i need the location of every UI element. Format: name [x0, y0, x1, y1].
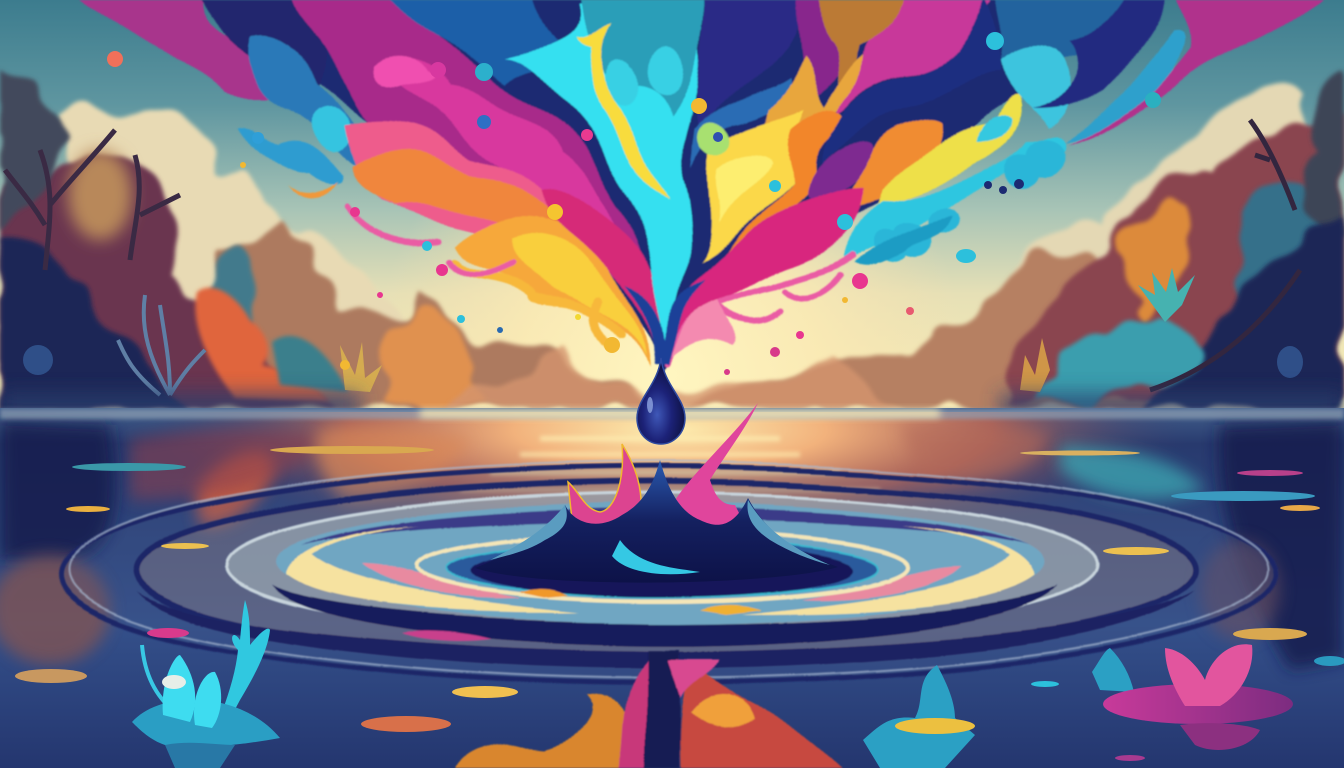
plume left inner magenta — [540, 188, 662, 362]
blue circle left — [23, 345, 53, 375]
dark top left tree — [0, 68, 68, 230]
plume dark purple corner — [190, 0, 324, 95]
far brown trees right — [680, 252, 1150, 408]
plume right lime band — [885, 92, 1021, 205]
plume left cyan droplet — [240, 129, 346, 187]
plume central yellow ribbon — [582, 25, 665, 198]
warm reflection left edge — [0, 555, 110, 665]
ripple outer highlight — [68, 462, 1268, 678]
reflected teal trees right — [1060, 445, 1205, 499]
ripple dark center — [470, 544, 850, 596]
plume right purple — [794, 0, 850, 96]
bright water streaks — [460, 436, 880, 492]
reflection right orange — [679, 670, 850, 768]
plume left yellow orange — [455, 215, 650, 365]
lake water — [0, 408, 1344, 768]
reflected orange trees left — [195, 451, 274, 526]
mid shoreline haze — [440, 352, 900, 408]
blue circle right — [1277, 346, 1303, 378]
plume right cyan swirl — [1000, 46, 1068, 125]
ripple inner blue ring — [445, 540, 875, 596]
orange foliage — [195, 288, 330, 402]
plume stem pink curls — [350, 210, 850, 362]
water base — [0, 408, 1344, 768]
plume right blue ribbon — [690, 75, 786, 170]
cloud right — [970, 92, 1310, 350]
bare branches right — [1150, 120, 1300, 390]
flower centre petals — [863, 665, 975, 768]
plume right gold — [760, 55, 866, 131]
plume left orange band — [355, 151, 628, 275]
plume right magenta base — [668, 190, 870, 360]
plume right magenta top — [840, 0, 1000, 112]
ripple ring 2 — [135, 482, 1195, 658]
magenta stain — [400, 630, 490, 640]
plume top blue band — [375, 0, 600, 85]
horizon glow — [300, 90, 1040, 420]
drop body — [637, 358, 685, 444]
warm reflection right edge — [1200, 540, 1280, 640]
orange tree right — [1115, 199, 1192, 315]
yellow reed right — [1020, 338, 1050, 392]
plume right pale pink petals — [672, 300, 738, 355]
plume right navy ribbon — [820, 0, 1000, 165]
plume right lower teal — [850, 215, 955, 266]
dark corner top right — [1302, 72, 1344, 240]
flower right — [1103, 644, 1293, 750]
flower right petals — [1165, 644, 1252, 706]
splash right pink arm — [672, 403, 758, 535]
plume pink bulb — [372, 56, 431, 84]
amber canopy left — [68, 150, 132, 240]
plume left yellow curls — [455, 262, 620, 350]
warm trees left — [0, 149, 335, 412]
plume lime droplet — [698, 121, 732, 155]
reflected warm trees right — [900, 423, 1050, 483]
plume right orange brown top — [815, 0, 906, 100]
reflection left orange — [450, 695, 645, 768]
plume left cyan blob — [312, 108, 352, 152]
ripple dark crescent — [272, 585, 1058, 645]
flower centre right — [863, 665, 975, 768]
cloud left — [60, 106, 402, 370]
ripple top dark band — [300, 508, 1030, 545]
flower centre yellow pad — [895, 718, 975, 734]
lily pads — [15, 446, 1344, 761]
plume central cyan — [505, 0, 702, 350]
plume stem blue — [632, 280, 706, 362]
horizon bright band — [420, 410, 940, 417]
splash crown — [475, 403, 838, 583]
ripple pink streak left — [360, 565, 520, 598]
flower right pad — [1103, 684, 1293, 724]
dark reflection left — [0, 420, 115, 560]
plume right purple core — [806, 142, 880, 206]
reflection of plume — [450, 650, 850, 768]
ripple yellow crescent left — [285, 525, 580, 612]
plume right navy slash — [1030, 0, 1170, 105]
plume right blue tail — [1062, 29, 1183, 140]
paint droplets — [107, 32, 1161, 375]
sunset reflection — [150, 412, 1190, 552]
bare tree left — [5, 130, 180, 270]
plume upper magenta band — [290, 0, 653, 330]
plume right cyan droplet in lime — [980, 115, 1015, 145]
sky background — [0, 0, 1344, 420]
flower left petal 1 — [163, 655, 195, 722]
plume right orange flame — [830, 121, 942, 225]
treeline right — [680, 72, 1344, 415]
plume right top blue — [990, 0, 1140, 69]
splash right pale blue ridge — [747, 500, 830, 565]
far shore highlight — [0, 409, 1344, 419]
teal bush right — [1035, 315, 1206, 405]
splash left pale blue ridge — [490, 505, 567, 560]
reflection dark stem — [645, 650, 680, 768]
plume right orange wave — [715, 108, 850, 265]
ripples — [60, 462, 1276, 683]
shore shade left — [0, 394, 360, 418]
plume navy back — [210, 0, 1110, 370]
ripple pink streak right — [800, 565, 960, 598]
ripple yellow crescent right — [740, 525, 1035, 612]
splash left pink arm — [568, 444, 641, 545]
plume right cyan band — [840, 133, 1063, 262]
plume cyan heart left — [609, 56, 641, 100]
plume cyan heart right — [651, 48, 685, 96]
reflection right yellow — [690, 699, 755, 730]
plume far left magenta — [62, 0, 322, 112]
dark bank right — [1140, 215, 1344, 415]
small teal plant — [1092, 648, 1134, 692]
teal fern right — [1138, 268, 1195, 322]
flower left curved stem — [142, 645, 175, 712]
flower left reflection — [165, 743, 235, 768]
plume far right magenta — [1065, 0, 1344, 142]
clouds — [60, 92, 1310, 370]
blue fern left — [118, 295, 205, 395]
plume right top navy — [698, 0, 800, 130]
ripple ring 3 — [226, 493, 1098, 637]
reflected red trees left — [130, 429, 320, 500]
drop highlight — [647, 397, 653, 413]
warm trees right — [1005, 110, 1344, 400]
teal far trees — [205, 244, 253, 325]
flower left petal 2 — [194, 672, 221, 728]
flower left — [132, 600, 280, 768]
splash main crown — [475, 460, 838, 583]
plume left blue sweep — [247, 33, 385, 167]
ink plume — [62, 0, 1344, 370]
reflection left magenta — [615, 660, 645, 768]
flower left sprig — [222, 600, 270, 715]
ripple outer ring — [60, 467, 1276, 683]
reflected orange trees centre left — [316, 426, 470, 500]
flower left white petal — [162, 675, 186, 689]
ripple inner cream ring — [415, 532, 905, 600]
yellow reed left — [340, 342, 382, 392]
splash cyan foot — [612, 540, 700, 574]
treeline left — [0, 68, 660, 415]
plume left pink orange band — [345, 119, 640, 330]
reflection upper magenta — [668, 660, 720, 700]
ripple pool base — [275, 502, 1045, 622]
dark reflection right — [1219, 420, 1344, 670]
far brown trees left — [200, 225, 660, 408]
plume bright magenta swirl — [375, 57, 625, 230]
plume right scallop blobs — [872, 137, 1063, 263]
shore shade right — [1000, 394, 1344, 418]
plume right pale yellow core — [716, 154, 768, 225]
ripple lower dark band — [135, 590, 1195, 668]
flower left outer petals — [132, 700, 280, 747]
dark foreground bank left — [0, 240, 185, 415]
teal bush left — [272, 336, 348, 392]
orange swoosh left — [283, 183, 340, 204]
plume left yellow core — [512, 234, 645, 355]
teal tree upper right — [1240, 181, 1330, 320]
orange far tree — [385, 306, 485, 405]
ink drop — [637, 358, 685, 444]
orange ink streak right — [700, 603, 760, 612]
orange ink streak — [520, 589, 570, 597]
flower right reflection — [1180, 723, 1260, 750]
plume central teal top — [575, 0, 707, 118]
plume right big yellow — [700, 105, 800, 262]
